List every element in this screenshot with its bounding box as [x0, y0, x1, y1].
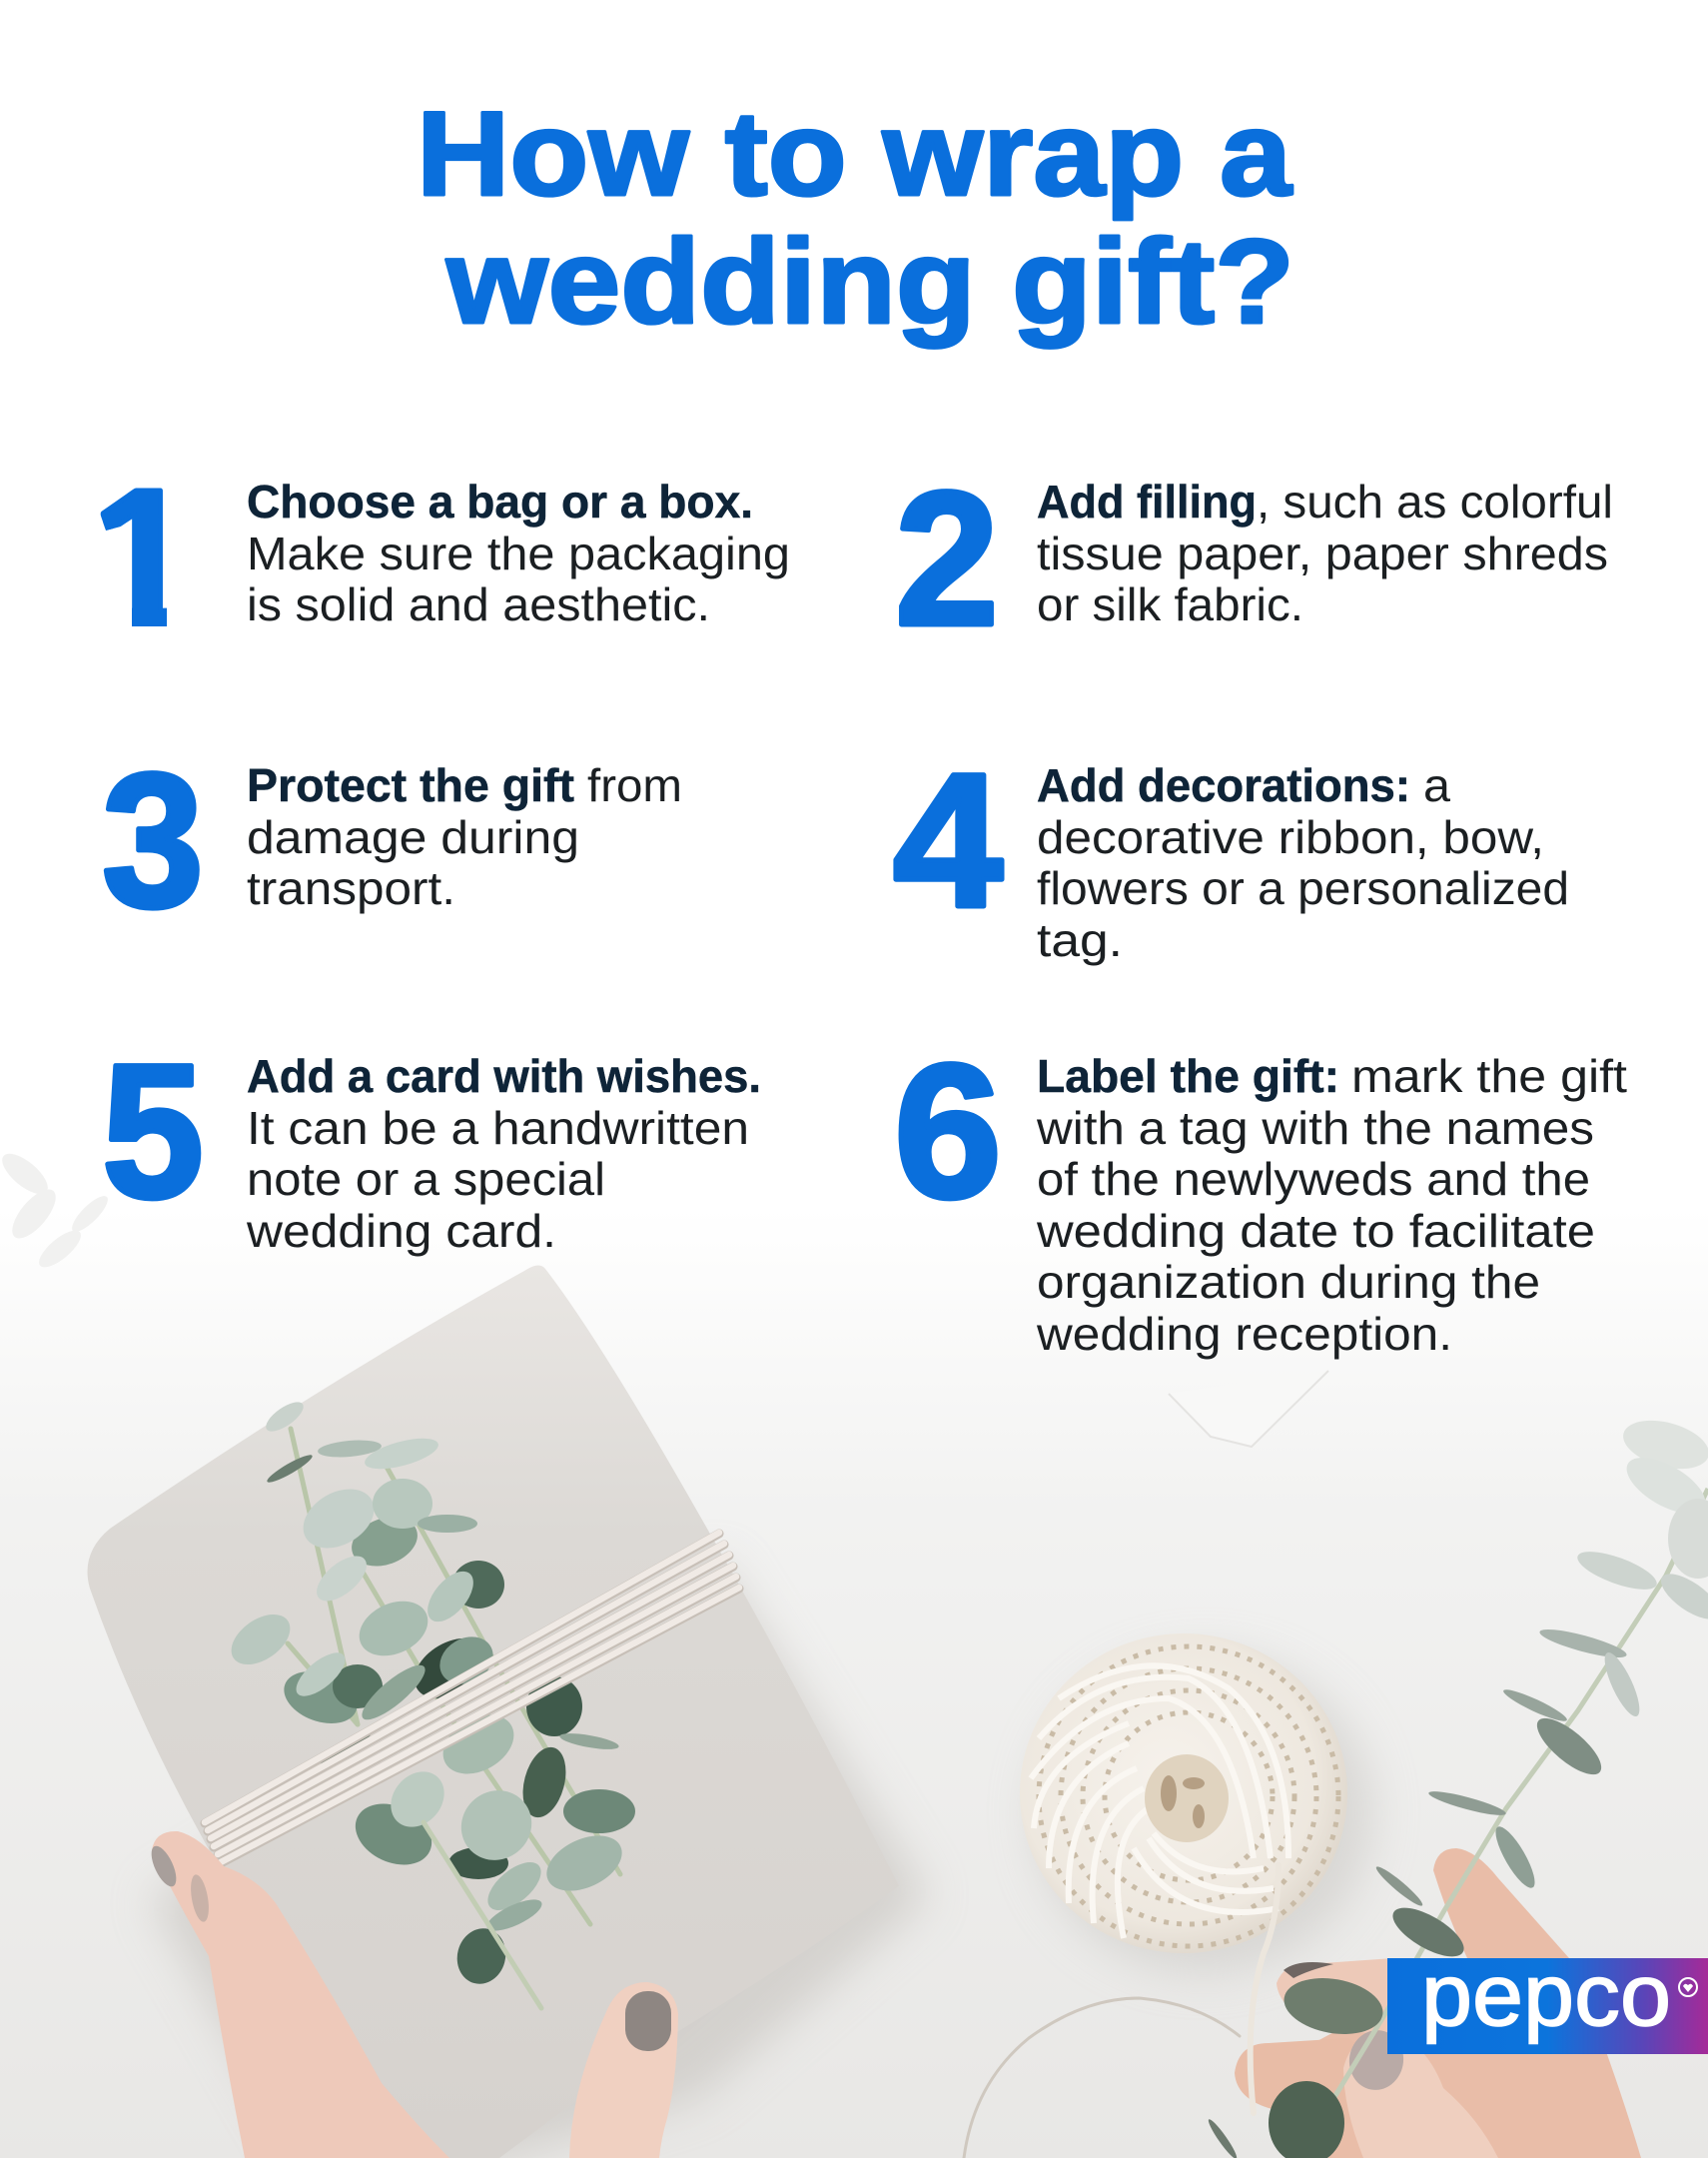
- step 6 text: with a tag with the names: [1036, 1102, 1594, 1154]
- gift box: [88, 1265, 899, 2158]
- palm and index finger: [1249, 1848, 1641, 2158]
- step 5 text: note or a special: [247, 1153, 605, 1205]
- thumb nail: [1344, 2026, 1408, 2094]
- step 5: [102, 1025, 761, 1257]
- title: How to wrap a: [417, 87, 1292, 221]
- ball of twine: [1020, 1633, 1373, 1973]
- step 5 text: wedding card.: [246, 1205, 556, 1257]
- number 4: 4: [893, 734, 1003, 947]
- stem over lower leaves: [424, 1822, 541, 2008]
- number 5: 5: [102, 1025, 204, 1238]
- ball shadow: [1034, 1653, 1373, 1973]
- step 5 text: Add a card with wishes.: [247, 1050, 761, 1102]
- pepco logo: [1387, 1945, 1708, 2054]
- faint envelope corner: [1169, 1371, 1328, 1447]
- number 6: 6: [894, 1025, 1002, 1238]
- title: [417, 87, 1294, 349]
- thumb nail: [625, 1991, 671, 2051]
- step 6 text: Label the gift:: [1037, 1050, 1339, 1102]
- registered heart mark: [1679, 1978, 1697, 1996]
- nails: [147, 1842, 181, 1890]
- middle finger: [1277, 1958, 1418, 2038]
- twine around gift: [205, 1533, 739, 1863]
- step 6 text: wedding reception.: [1036, 1308, 1452, 1360]
- eucalyptus sprigs on gift: [222, 1397, 635, 1989]
- step 4 text: tag.: [1037, 914, 1123, 966]
- faint background leaves: [0, 1147, 113, 1273]
- left hand holding gift: [147, 1831, 678, 2158]
- thumb: [1343, 2033, 1498, 2158]
- right hand with sprig: [1235, 1848, 1641, 2158]
- step 3 text: from: [587, 759, 682, 811]
- twine strand: [964, 1865, 1279, 2158]
- step 3: [102, 734, 682, 947]
- step 6: [894, 1025, 1627, 1360]
- title: wedding gift?: [445, 215, 1294, 349]
- step 3 text: transport.: [247, 862, 455, 914]
- step 3 text: Protect the gift: [247, 759, 574, 811]
- number 1: 1: [90, 447, 196, 675]
- step 2 text: [1037, 476, 1613, 630]
- step 6 text: mark the gift: [1351, 1050, 1627, 1102]
- ball: [1020, 1633, 1347, 1953]
- step 6 text: [1036, 1050, 1627, 1360]
- loose loop: [964, 1998, 1240, 2158]
- step 4 text: decorative ribbon, bow,: [1037, 811, 1544, 863]
- step 6 text: wedding date to facilitate: [1036, 1205, 1595, 1257]
- number 3: 3: [102, 734, 204, 947]
- step 5 text: It can be a handwritten: [247, 1102, 749, 1154]
- twine swirl strands: [1031, 1665, 1288, 1938]
- step 6 text: of the newlyweds and the: [1037, 1153, 1590, 1205]
- step 2: [895, 453, 1613, 665]
- step 6 text: organization during the: [1037, 1256, 1540, 1308]
- step 4: [893, 734, 1569, 966]
- step 4 text: [1037, 759, 1569, 966]
- middle nail: [1283, 1962, 1333, 1978]
- photo: wrapped gift box: [88, 1265, 929, 2158]
- index finger: [152, 1831, 449, 2158]
- number 2: 2: [895, 453, 999, 665]
- core detail: [1161, 1775, 1205, 1828]
- step 5 text: [246, 1050, 761, 1257]
- step 1 text: is solid and aesthetic.: [247, 578, 710, 630]
- step 2 text: Add filling: [1037, 476, 1257, 528]
- step 1: [90, 447, 790, 675]
- ball core: [1145, 1754, 1229, 1842]
- step 4 text: flowers or a personalized: [1037, 862, 1569, 914]
- ring finger: [1235, 2038, 1418, 2128]
- step 3 text: [247, 759, 682, 914]
- step 1 text: Make sure the packaging: [247, 528, 790, 579]
- step 4 text: Add decorations:: [1037, 759, 1410, 811]
- eucalyptus branch: [1206, 1412, 1708, 2158]
- step 1 text: [247, 476, 790, 630]
- step 2 text: or silk fabric.: [1037, 578, 1303, 630]
- thumb: [569, 1982, 678, 2158]
- step 4 text: a: [1423, 759, 1450, 811]
- twine texture rings: [1039, 1646, 1338, 1946]
- step 1 text: Choose a bag or a box.: [247, 476, 753, 528]
- step 2 text: tissue paper, paper shreds: [1037, 528, 1608, 579]
- pepco logo: pepco: [1421, 1945, 1671, 2044]
- step 3 text: damage during: [247, 811, 579, 863]
- gift shadow: [150, 1559, 929, 2158]
- step 2 text: , such as colorful: [1257, 476, 1613, 528]
- second nail: [188, 1873, 212, 1923]
